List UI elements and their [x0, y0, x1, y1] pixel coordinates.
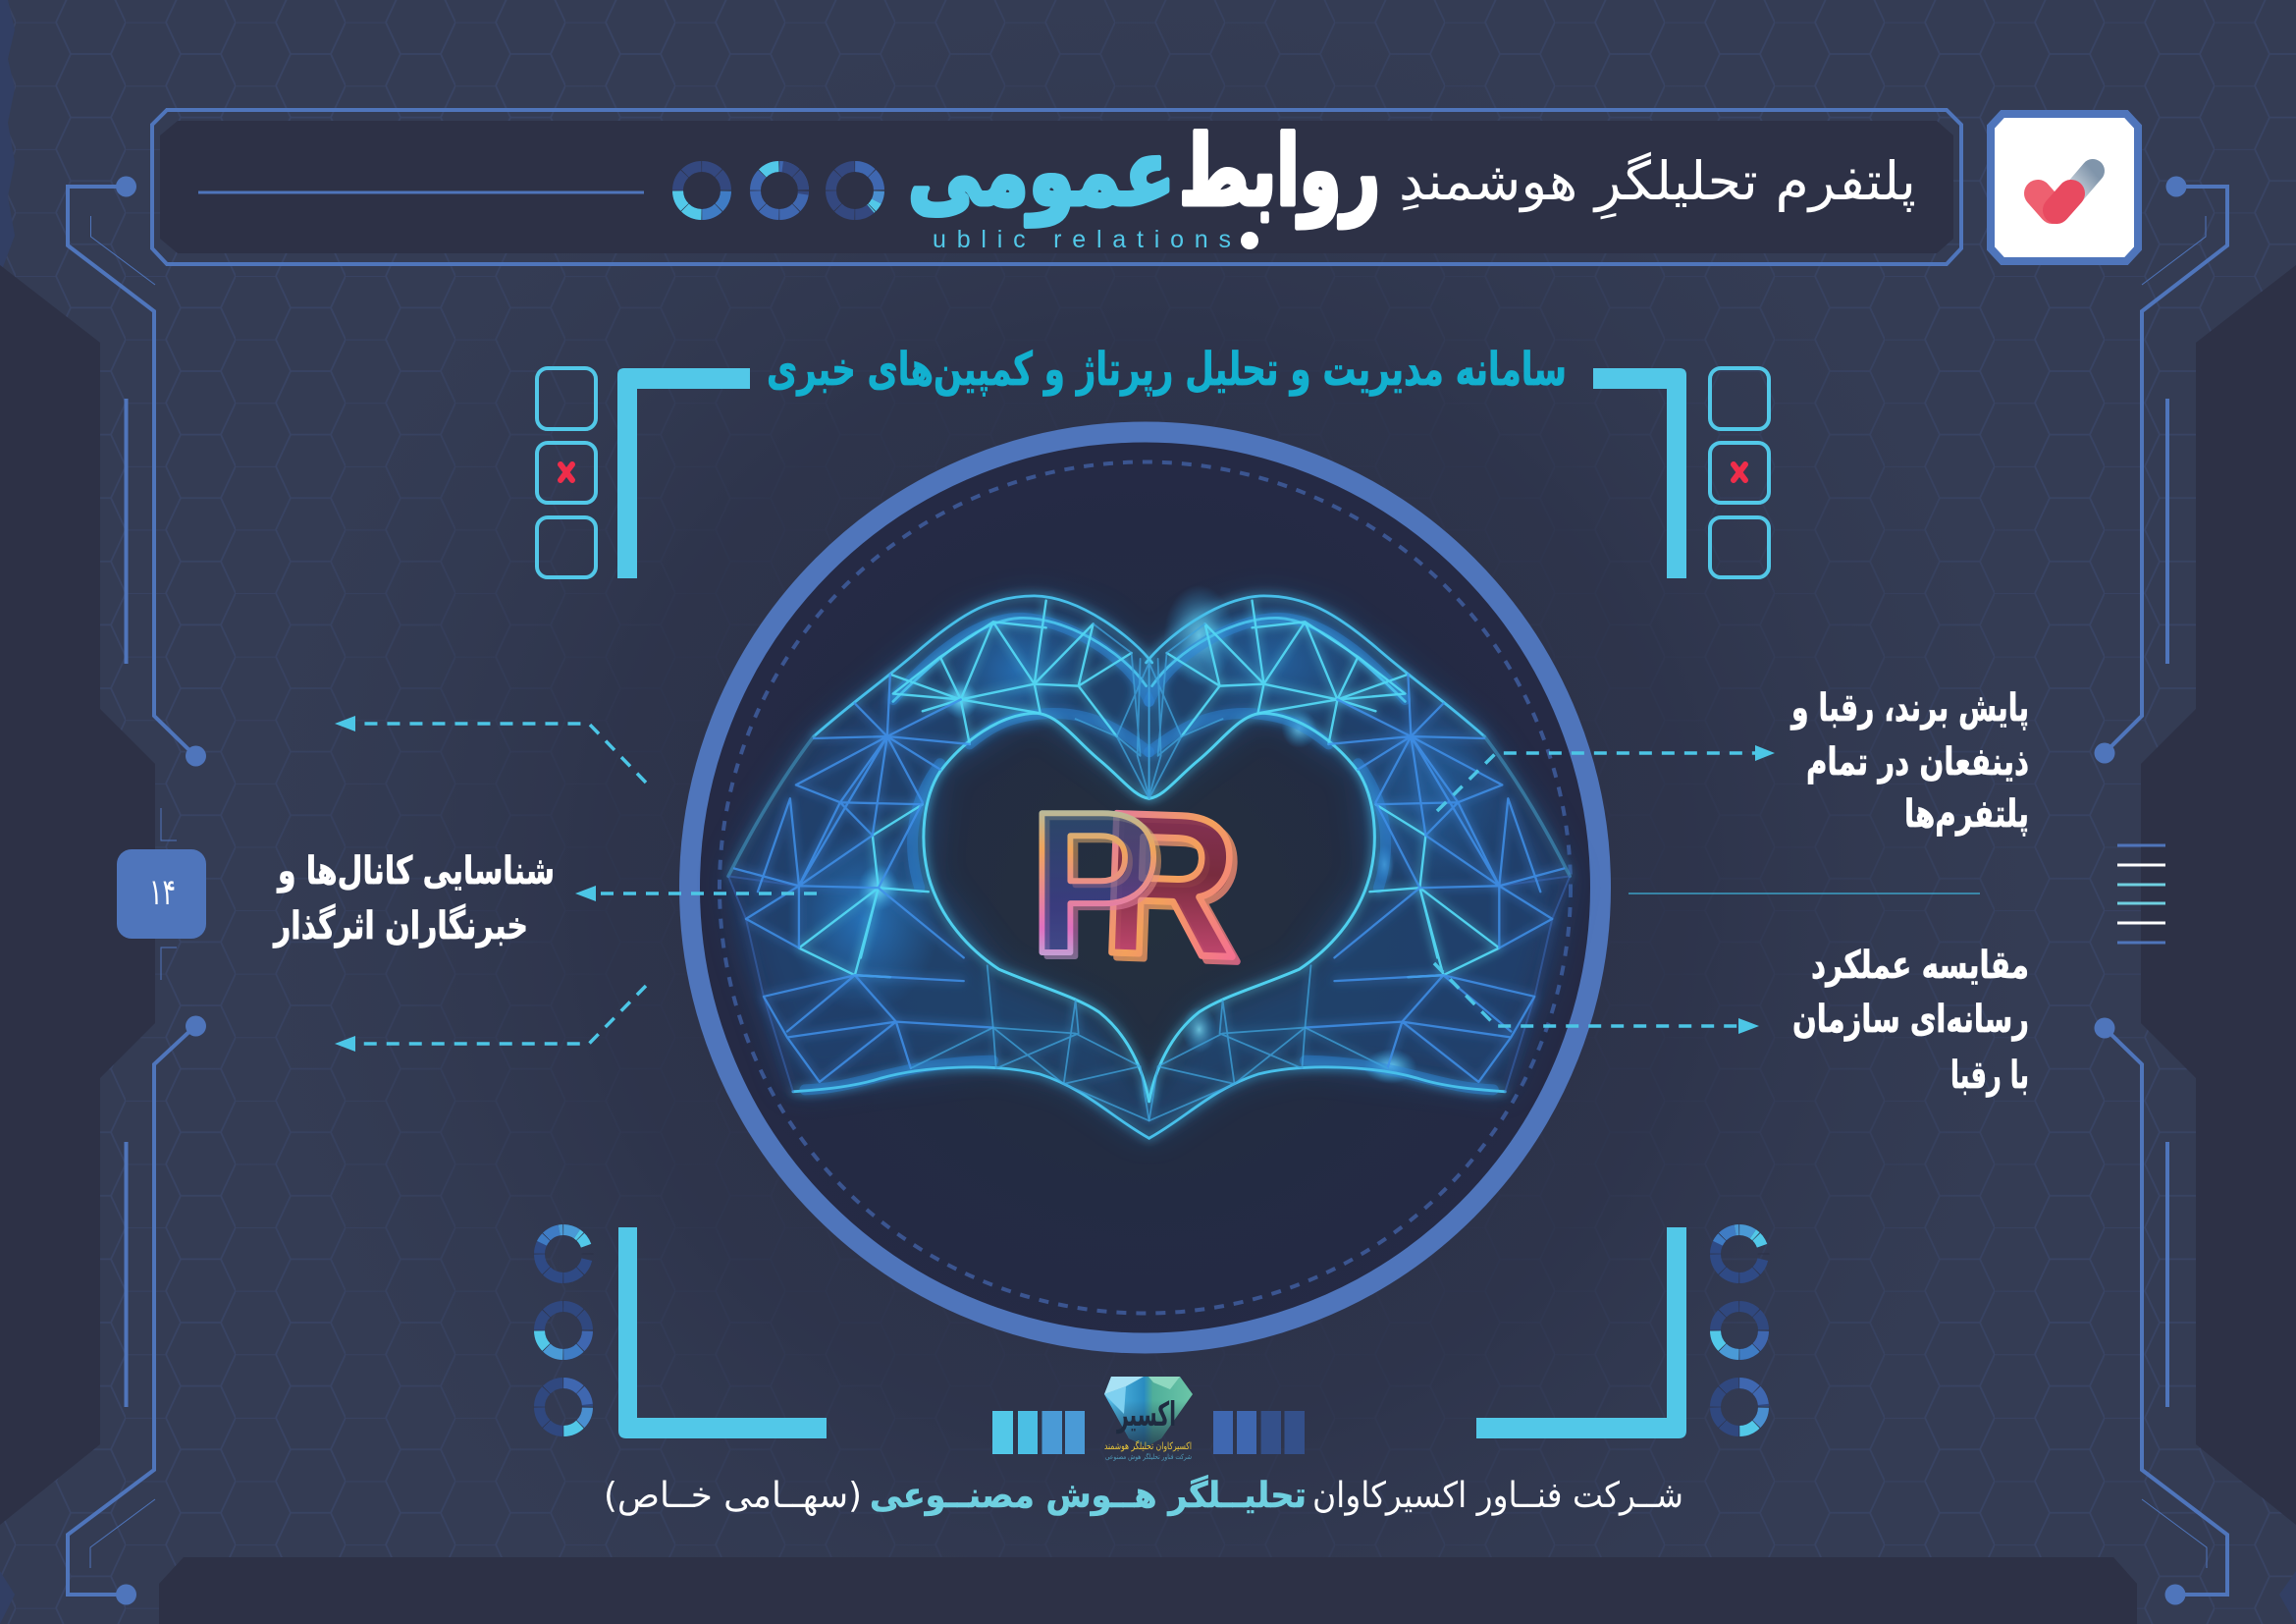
callout: media comparison: رسانه‌ای سازمان — [1792, 998, 2029, 1042]
callout: channels and journalists — [272, 849, 555, 948]
callout: media comparison — [1792, 944, 2029, 1098]
logo card — [1991, 114, 2138, 261]
company logo: اکسیر — [1116, 1395, 1176, 1435]
rings: bottom right — [1716, 1229, 1763, 1432]
bottom bars: left — [992, 1411, 1085, 1454]
central circle — [689, 432, 1600, 1343]
PR 3D letters: R — [1097, 770, 1243, 1000]
check boxes: left — [537, 368, 596, 577]
rings: bottom left — [540, 1229, 587, 1432]
arrow: lower right — [1434, 963, 1759, 1034]
callout: brand monitoring: پلتفرم‌ها — [1904, 792, 2029, 837]
right side stripes — [2117, 845, 2165, 943]
header rings — [677, 167, 880, 214]
wordmark: public relations: ublic relations — [933, 226, 1231, 253]
circuit: lower left — [68, 1015, 206, 1604]
right dark side panel — [2141, 265, 2296, 1525]
company logo — [1104, 1377, 1193, 1461]
company name line: (سهــامی خــاص) — [604, 1476, 862, 1516]
circuit: lower right — [2095, 1017, 2227, 1604]
subtitle: سامانه مدیریت و تحلیل رپرتاژ و کمپین‌های خبری — [767, 343, 1567, 397]
PR 3D letters — [1029, 770, 1248, 1004]
right divider line — [1629, 893, 1980, 894]
header frame — [152, 110, 1961, 264]
bottom dark panel — [159, 1557, 2137, 1624]
bracket: top left — [617, 368, 750, 578]
wordmark: public relations — [908, 116, 1380, 253]
bracket: bottom left — [618, 1227, 827, 1438]
callout: channels and journalists: خبرنگاران اثرگذار — [272, 903, 528, 948]
left dark side panel — [0, 265, 155, 1525]
company name line: شــرکت فنــاور اکسیرکاوان — [1312, 1476, 1683, 1516]
circuit: upper right — [2095, 177, 2227, 764]
company name line: تحلیــلگر هــوش مصنــوعی — [870, 1475, 1307, 1516]
page number badge: ۱۴ — [149, 871, 176, 913]
callout: media comparison: با رقبا — [1950, 1054, 2029, 1098]
PR 3D letters: P — [1029, 770, 1160, 996]
arrow: middle left — [575, 886, 817, 901]
arrow: upper left — [335, 716, 646, 783]
company name line — [604, 1475, 1683, 1516]
callout: channels and journalists: شناسایی کانال‌ها و — [276, 849, 555, 893]
bracket: top right — [1593, 368, 1686, 578]
callout: brand monitoring: ذینفعان در تمام — [1806, 740, 2029, 785]
company logo: اکسیرکاوان تحلیلگر هوشمند — [1104, 1440, 1192, 1452]
page number badge — [117, 808, 206, 980]
bottom bars: right — [1213, 1411, 1305, 1454]
circuit: upper left — [68, 177, 206, 766]
bracket: bottom right — [1476, 1227, 1686, 1438]
wordmark: public relations: روابط — [1179, 116, 1380, 229]
hands forming a heart — [728, 585, 1570, 1138]
wordmark: public relations: عمومی — [908, 121, 1175, 227]
callout: brand monitoring: پایش برند، رقبا و — [1790, 686, 2029, 731]
callout: media comparison: مقایسه عملکرد — [1811, 944, 2029, 988]
company logo: شرکت فناور تحلیلگر هوش مصنوعی — [1105, 1452, 1192, 1461]
arrow: lower left — [335, 986, 646, 1052]
callout: brand monitoring — [1790, 686, 2029, 837]
check boxes: right — [1710, 368, 1769, 577]
arrow: upper right — [1437, 745, 1775, 811]
header title: پلتفرم تحلیلگرِ هوشمندِ — [1399, 150, 1916, 220]
